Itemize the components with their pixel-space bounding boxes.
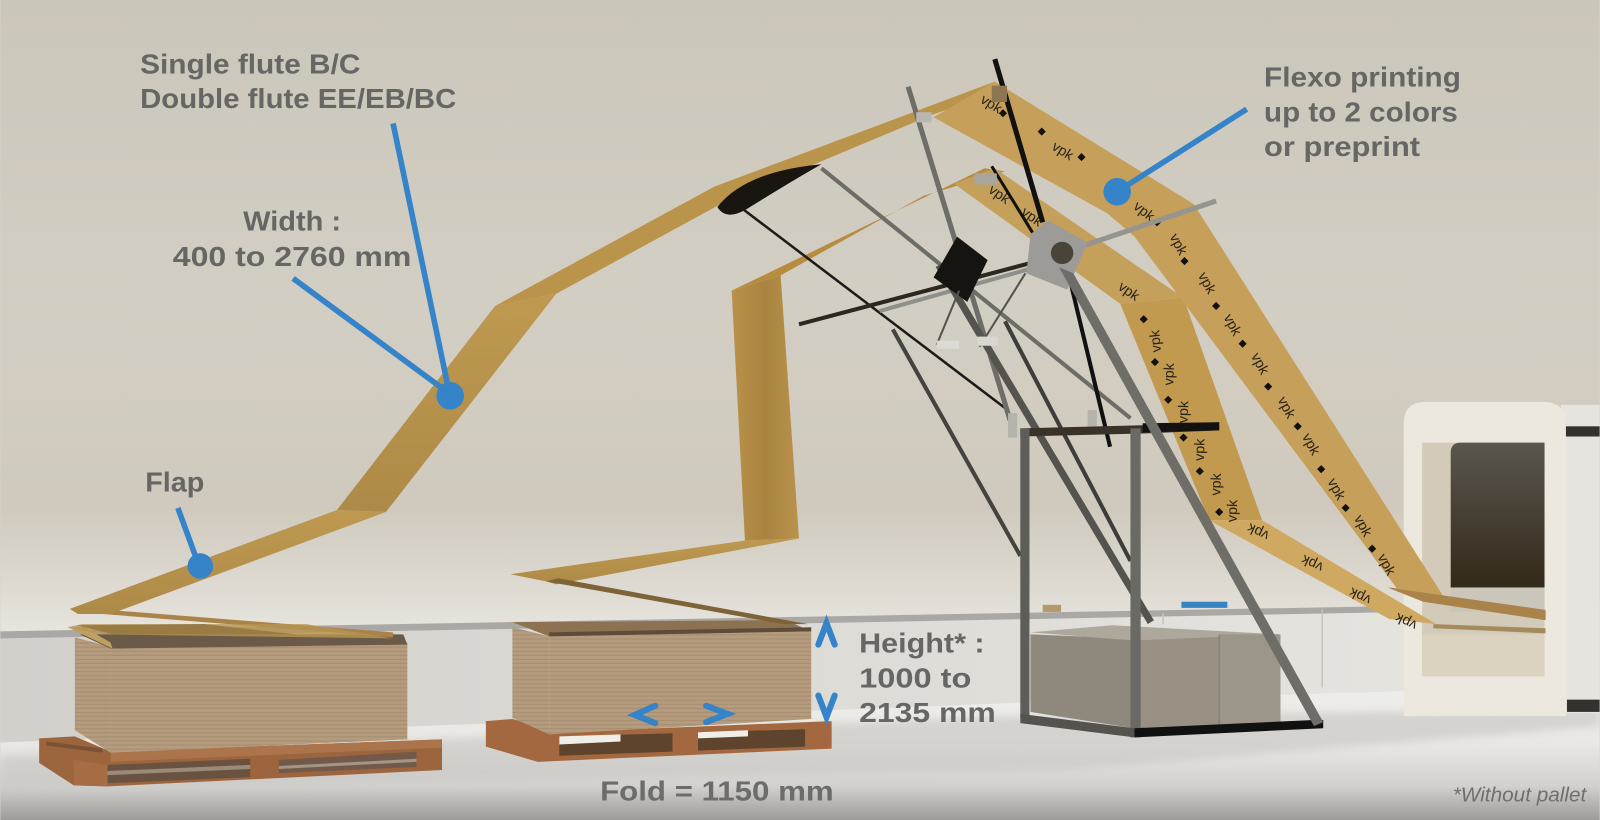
- label: flexo printing: or preprint: [1264, 131, 1420, 162]
- callout line and dot: flexo printing: [1103, 109, 1247, 206]
- label: width: Width :: [243, 205, 341, 236]
- stack of corrugated sheets on pallet, left: [39, 624, 442, 786]
- footnote: *Without pallet: [1453, 785, 1588, 807]
- printed vpk logos, rear band: vpk: [1192, 438, 1209, 461]
- callout line: flute types: [393, 123, 447, 382]
- label: flap: Flap: [145, 467, 204, 498]
- printed vpk logos, front band: vpk: [1166, 231, 1191, 259]
- stack of corrugated sheets on pallet, centre: [486, 620, 832, 762]
- label: width: 400 to 2760 mm: [173, 241, 411, 272]
- front cardboard ribbon with printed band: [68, 82, 1546, 638]
- printed vpk logos, front band: [977, 92, 1399, 579]
- label: height: Height* :: [859, 628, 985, 659]
- printed vpk logos, rear band: vpk: [985, 182, 1013, 208]
- printed vpk logos, front band: vpk: [1324, 476, 1349, 504]
- printed vpk logos, rear band: vpk: [1298, 551, 1326, 575]
- printed vpk logos, rear band: vpk: [1018, 204, 1046, 231]
- height arrows: [818, 623, 835, 717]
- label: flute types: Double flute EE/EB/BC: [140, 83, 456, 114]
- printed vpk logos, rear band: vpk: [1208, 472, 1225, 496]
- printed vpk logos, rear band: [985, 182, 1420, 633]
- label: height: 2135 mm: [859, 697, 996, 728]
- callout line and dot: width: [293, 278, 464, 409]
- printed vpk logos, front band: vpk: [1247, 350, 1272, 378]
- label: flute types: Single flute B/C: [140, 48, 361, 79]
- label: flexo printing: Flexo printing: [1264, 62, 1461, 93]
- printed vpk logos, front band: vpk: [1220, 312, 1245, 339]
- printed vpk logos, front band: vpk: [1374, 551, 1399, 579]
- printed vpk logos, front band: vpk: [1350, 512, 1375, 540]
- printed vpk logos, rear band: vpk: [1225, 499, 1241, 522]
- printed vpk logos, front band: vpk: [1049, 139, 1077, 165]
- label: flexo printing: up to 2 colors: [1264, 96, 1458, 127]
- rear cardboard ribbon with fold-down and printed band: [510, 168, 1436, 633]
- printed vpk logos, front band: vpk: [1298, 431, 1323, 459]
- printed vpk logos, rear band: vpk: [1176, 400, 1192, 423]
- callout line and dot: flap: [178, 508, 213, 579]
- printed vpk logos, rear band: vpk: [1346, 583, 1374, 608]
- printed vpk logos, front band: vpk: [977, 92, 1005, 118]
- printed vpk logos, rear band: vpk: [1244, 519, 1272, 543]
- steel frame support: [1020, 267, 1323, 737]
- feeding mechanism: rods and hubs: [717, 59, 1216, 622]
- printed vpk logos, rear band: vpk: [1147, 329, 1165, 353]
- printed vpk logos, front band: vpk: [1194, 270, 1219, 298]
- machine: feeder housing: [1390, 402, 1600, 716]
- printed vpk logos, rear band: vpk: [1161, 362, 1178, 386]
- concrete block: [1030, 625, 1280, 728]
- label: fold: Fold = 1150 mm: [600, 776, 834, 807]
- printed vpk logos, front band: vpk: [1130, 199, 1158, 225]
- printed vpk logos, rear band: vpk: [1392, 609, 1420, 633]
- printed vpk logos, front band: vpk: [1274, 394, 1299, 422]
- label: height: 1000 to: [859, 662, 971, 693]
- printed vpk logos, rear band: vpk: [1115, 279, 1143, 305]
- fold arrows: [635, 706, 728, 723]
